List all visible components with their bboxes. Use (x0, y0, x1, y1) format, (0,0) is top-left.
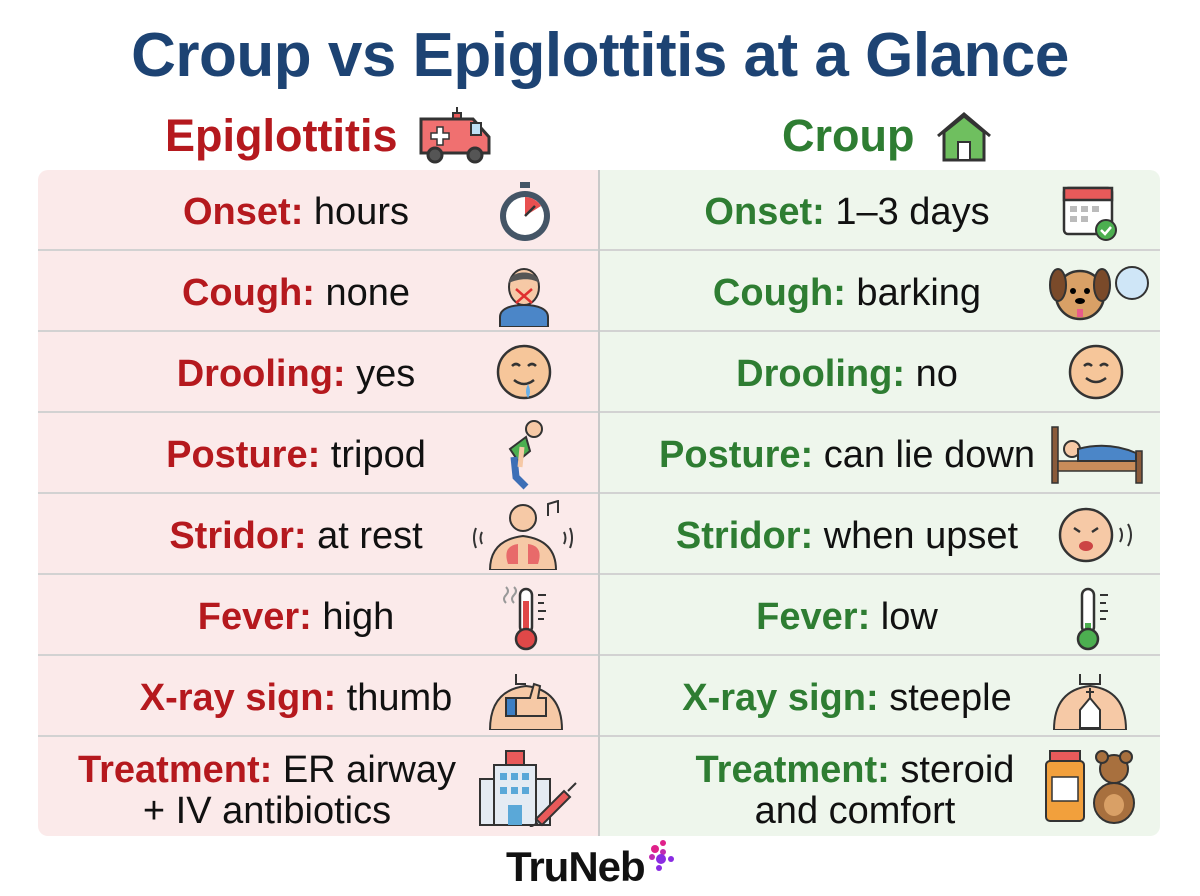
panel: croup column: Onset: 1–3 days (704, 191, 990, 233)
icon: logo dots (649, 840, 674, 871)
icon: house (937, 112, 991, 162)
title: Croup vs Epiglottitis at a Glance (131, 21, 1069, 90)
panel: croup column: Treatment: steroid (696, 749, 1014, 791)
panel: epiglottitis column: Cough: none (182, 272, 410, 314)
panel: epiglottitis column: Onset: hours (183, 191, 409, 233)
comparison table (38, 170, 1160, 836)
panel: epiglottitis column: Treatment: ER airway (78, 749, 456, 791)
panel: croup column: Stridor: when upset (676, 515, 1018, 557)
panel: croup column: and comfort (755, 790, 955, 832)
panel: croup column (600, 170, 1160, 836)
panel: epiglottitis column: X-ray sign: thumb (140, 677, 452, 719)
icon: ambulance (420, 107, 490, 164)
panel: croup column: Drooling: no (736, 353, 958, 395)
heading: epiglottitis: Epiglottitis (165, 110, 397, 161)
panel: croup column: Posture: can lie down (659, 434, 1035, 476)
panel: epiglottitis column: Posture: tripod (166, 434, 426, 476)
panel: croup column: X-ray sign: steeple (682, 677, 1012, 719)
heading: croup: Croup (782, 110, 914, 161)
heading: epiglottitis (165, 107, 490, 164)
panel: epiglottitis column: Fever: high (198, 596, 394, 638)
panel: epiglottitis column (38, 170, 600, 836)
panel: epiglottitis column: + IV antibiotics (143, 790, 391, 832)
heading: croup (782, 110, 991, 162)
panel: epiglottitis column: Stridor: at rest (169, 515, 423, 557)
panel: epiglottitis column: Drooling: yes (177, 353, 415, 395)
logo: TruNeb: TruNeb (506, 843, 645, 890)
panel: croup column: Cough: barking (713, 272, 981, 314)
panel: croup column: Fever: low (756, 596, 938, 638)
